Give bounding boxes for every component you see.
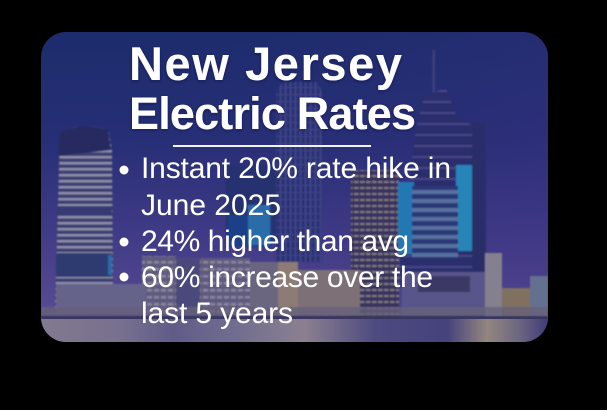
city skyline photo background	[41, 32, 548, 342]
infographic card	[41, 32, 548, 342]
bullet: five year increase	[120, 261, 433, 330]
bullet: rate hike	[120, 152, 451, 222]
bullet: higher than average: 24% higher than avg	[141, 225, 409, 258]
title underline	[173, 145, 371, 147]
right glass tower	[398, 50, 486, 290]
title	[129, 37, 416, 139]
low-rise buildings	[41, 253, 548, 317]
water reflection	[41, 319, 548, 342]
title: Electric Rates	[129, 88, 416, 139]
title: New Jersey	[129, 37, 402, 90]
middle dark building	[351, 170, 399, 320]
bullet: five year increase: 60% increase over the	[141, 261, 433, 294]
left skyscraper	[55, 125, 113, 310]
bullet: rate hike: June 2025	[141, 189, 281, 222]
buildings layer	[41, 50, 548, 320]
bullet: five year increase: last 5 years	[141, 297, 293, 330]
bullet list	[120, 152, 451, 330]
shoreline	[41, 316, 548, 319]
center tall tower	[226, 82, 322, 262]
bullet: rate hike: Instant 20% rate hike in	[141, 152, 451, 185]
